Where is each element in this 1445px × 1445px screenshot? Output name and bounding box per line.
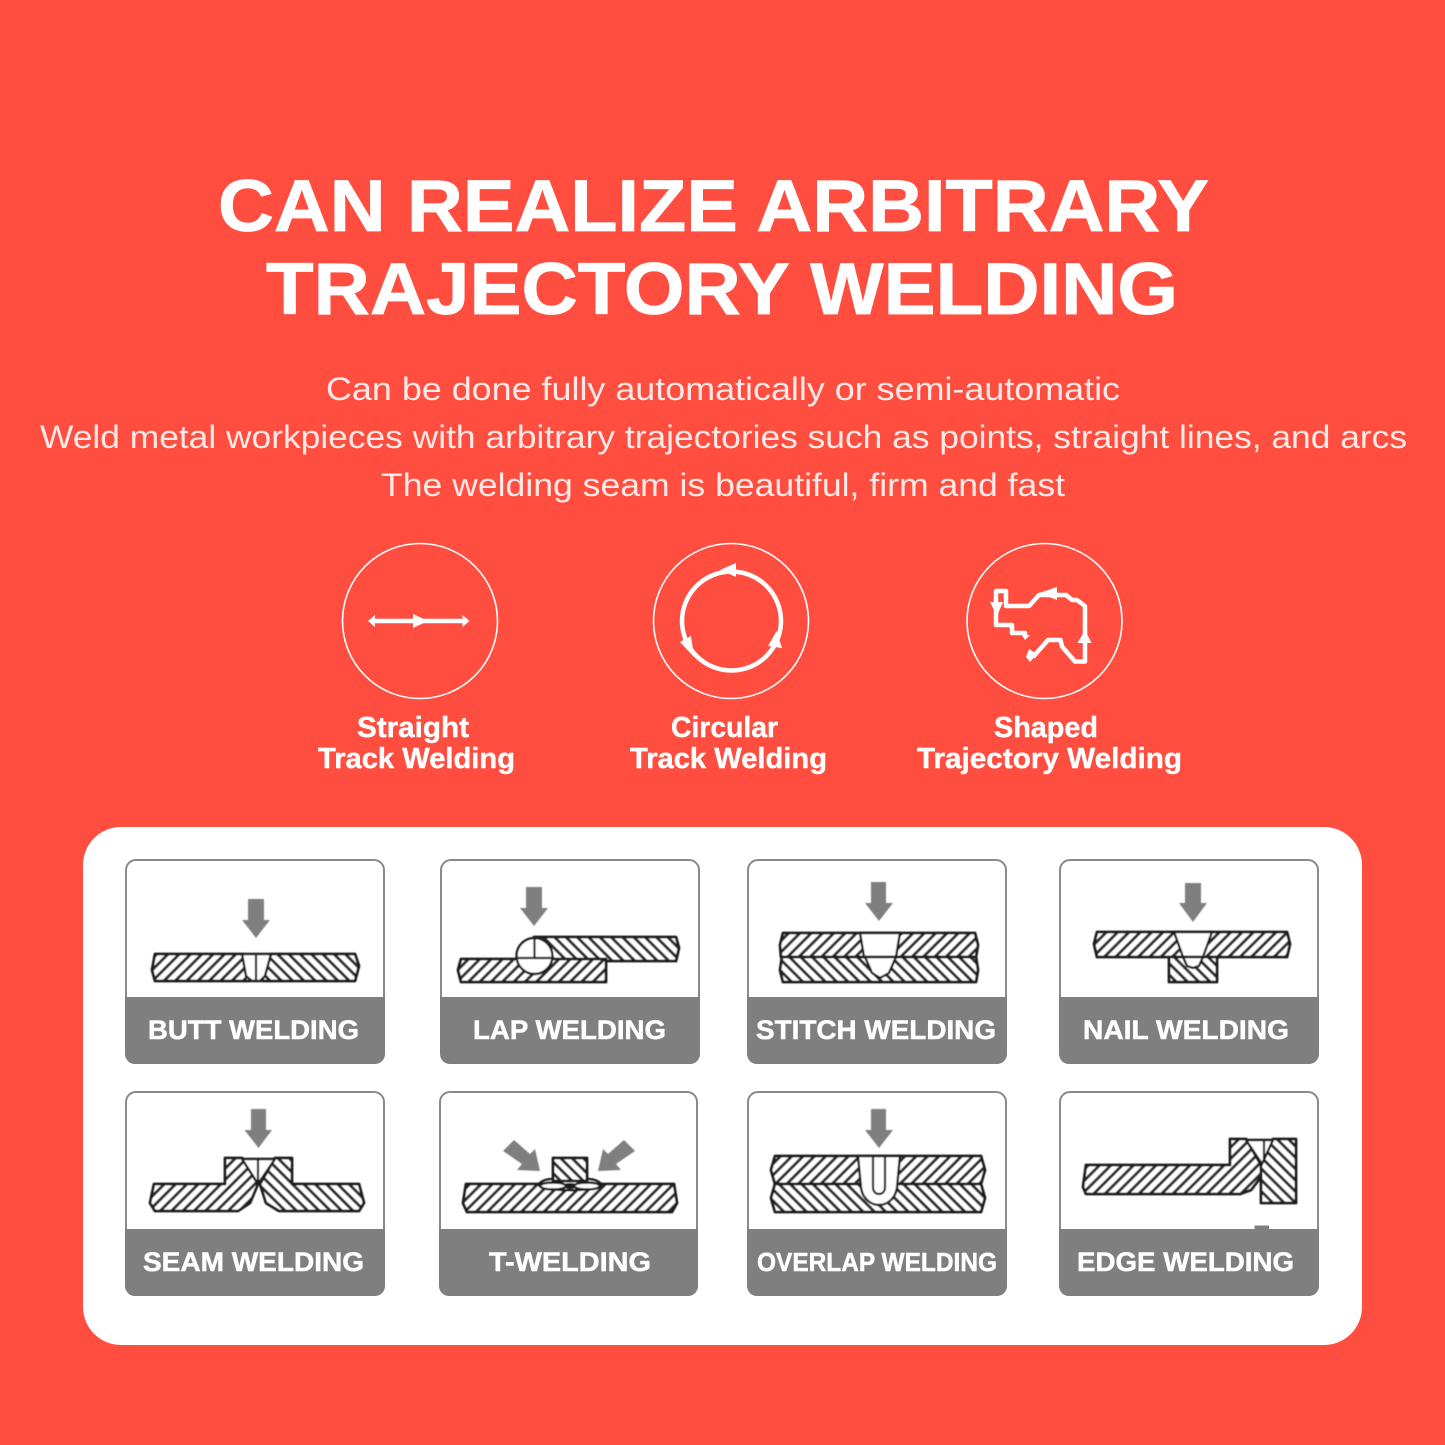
description text: Weld metal workpieces with arbitrary trajectories such as points, straight lines, and arcs (40, 419, 1407, 455)
label: straight track welding: Track Welding (318, 743, 515, 775)
card: stitch welding: STITCH WELDING (756, 1015, 996, 1045)
card: seam welding: SEAM WELDING (143, 1247, 364, 1277)
shaped trajectory welding item (917, 544, 1182, 775)
card: butt welding: BUTT WELDING (148, 1015, 359, 1045)
card: edge welding: EDGE WELDING (1077, 1247, 1294, 1277)
label: shaped trajectory welding (917, 712, 1182, 775)
circular track welding item (630, 544, 827, 775)
label: circular track welding (630, 712, 827, 775)
title: CAN REALIZE ARBITRARY (218, 166, 1209, 247)
card: lap welding (440, 860, 700, 1064)
diagram: overlap weld (771, 1109, 985, 1212)
label: circular track welding: Circular (671, 712, 778, 744)
description text: The welding seam is beautiful, firm and fast (381, 467, 1065, 503)
card: nail welding: NAIL WELDING (1083, 1015, 1289, 1045)
description text: Can be done fully automatically or semi-automatic (326, 371, 1120, 407)
label: shaped trajectory welding: Trajectory Welding (917, 743, 1182, 775)
panel: welding types (83, 827, 1362, 1345)
card: edge welding (1059, 1092, 1319, 1296)
diagram: nail weld (1094, 883, 1290, 982)
title (218, 166, 1209, 330)
diagram: seam weld (150, 1109, 364, 1211)
card: nail welding (1059, 860, 1319, 1064)
card: stitch welding (747, 860, 1007, 1064)
description text (40, 371, 1407, 503)
card: t-welding (439, 1092, 698, 1296)
label: circular track welding: Track Welding (630, 743, 827, 775)
icon: circular track (654, 544, 808, 698)
diagram: lap weld (458, 887, 679, 982)
straight track welding item (318, 544, 515, 775)
diagram: edge weld (1083, 1139, 1296, 1203)
icon: shaped trajectory (967, 544, 1122, 698)
label: straight track welding: Straight (357, 712, 470, 744)
icon: straight track (342, 544, 498, 698)
card: overlap welding (747, 1092, 1007, 1296)
label: shaped trajectory welding: Shaped (994, 712, 1098, 744)
diagram: stitch weld (780, 882, 978, 982)
card: overlap welding: OVERLAP WELDING (757, 1249, 997, 1277)
card: lap welding: LAP WELDING (473, 1015, 666, 1045)
card: butt welding (125, 860, 385, 1064)
title: TRAJECTORY WELDING (266, 249, 1178, 330)
card: seam welding (125, 1092, 385, 1296)
label: straight track welding (318, 712, 515, 775)
diagram: t-weld (463, 1140, 677, 1212)
diagram: butt weld (152, 899, 359, 981)
card: t-welding: T-WELDING (489, 1247, 651, 1277)
